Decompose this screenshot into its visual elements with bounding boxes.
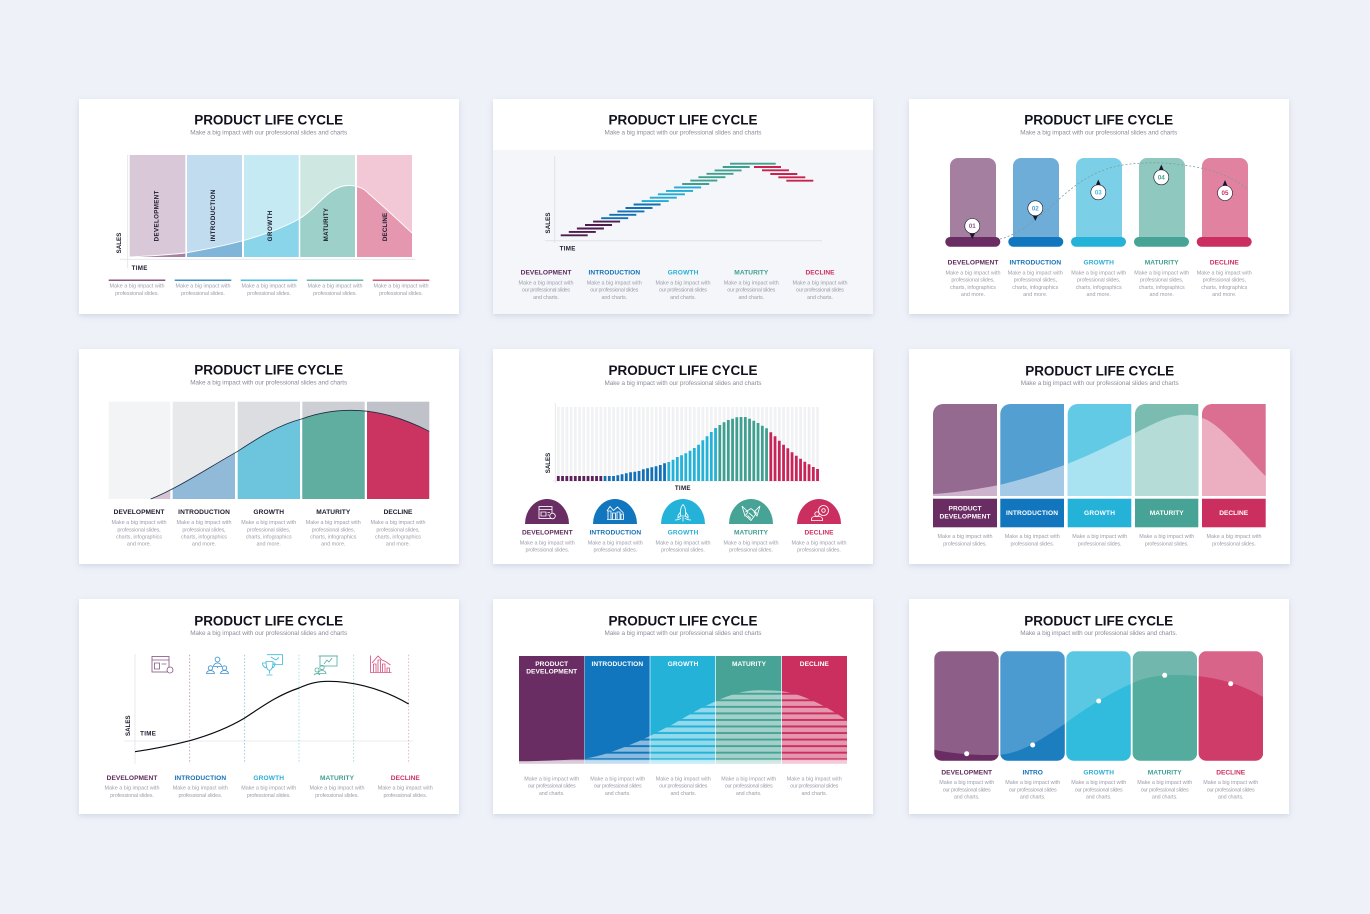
stage: decline with icon: Make a big impact with bbox=[792, 540, 846, 546]
stage notes bbox=[524, 776, 842, 797]
stage: development: Make a big impact with bbox=[518, 280, 574, 286]
chart: grey bands and coloured area bbox=[109, 402, 429, 499]
stage: growth: Make a big impact with bbox=[1071, 270, 1126, 276]
stage: introduction: Make a big impact with bbox=[176, 520, 232, 526]
stage: development: Make a big impact with bbox=[946, 270, 1000, 276]
stage notes: Make a big impact with bbox=[173, 786, 228, 792]
stage: growth with icon: Make a big impact with bbox=[656, 540, 710, 546]
stage: development with icon: DEVELOPMENT bbox=[522, 530, 573, 537]
stage: introduction: charts, infographics bbox=[181, 534, 227, 540]
stage notes bbox=[938, 534, 1262, 547]
stage: decline with icon bbox=[792, 499, 846, 554]
pin 03: 03 bbox=[1095, 190, 1102, 196]
stage: introduction: Make a big impact with bbox=[1008, 270, 1063, 276]
stage: maturity: charts, infographics bbox=[310, 534, 357, 540]
stage notes: Make a big impact with bbox=[1206, 534, 1262, 540]
subtitle: Make a big impact with our professional slides and charts bbox=[604, 380, 762, 387]
stage notes: and charts. bbox=[1152, 794, 1178, 800]
stage: growth: charts, infographics bbox=[246, 534, 292, 540]
stage notes: our professional slides bbox=[528, 784, 576, 790]
stage: maturity: and more. bbox=[321, 542, 345, 548]
axis label: sales: SALES bbox=[545, 212, 552, 234]
stage notes: Make a big impact with bbox=[104, 786, 160, 792]
stage notes: Make a big impact with bbox=[1071, 780, 1126, 786]
stage: introduction: INTRODUCTION bbox=[588, 270, 640, 277]
stage: development bbox=[518, 270, 574, 301]
pin 01: 01 bbox=[969, 223, 976, 230]
stage notes: Make a big impact with bbox=[939, 780, 994, 786]
stage notes: professional slides. bbox=[178, 793, 222, 799]
stage: growth with icon: GROWTH bbox=[668, 530, 699, 537]
pin 05: 05 bbox=[1222, 190, 1229, 197]
subtitle: Make a big impact with our professional slides and charts bbox=[1021, 380, 1179, 387]
label bar: maturity: MATURITY bbox=[1150, 510, 1184, 517]
stage: introduction bbox=[1008, 260, 1063, 298]
stage: decline: and charts. bbox=[807, 295, 833, 301]
stage: maturity with icon bbox=[724, 499, 778, 554]
title: PRODUCT LIFE CYCLE bbox=[194, 113, 343, 128]
chart: shaded stage bands with curve: GROWTH bbox=[267, 210, 274, 241]
stage: growth bbox=[241, 509, 296, 548]
subtitle: Make a big impact with our professional slides and charts bbox=[190, 630, 347, 637]
stage notes: MATURITY bbox=[1148, 770, 1182, 777]
stage notes: Make a big impact with bbox=[1203, 780, 1258, 786]
stage notes: Make a big impact with bbox=[524, 776, 579, 782]
stage: introduction: professional slides, bbox=[1014, 278, 1057, 284]
stage: introduction: professional slides, bbox=[182, 527, 226, 533]
stage notes: our professional slides bbox=[1207, 787, 1255, 793]
axis label: sales: SALES bbox=[116, 233, 123, 253]
stage: maturity: Make a big impact with bbox=[306, 520, 361, 526]
panel: slide 9 rounded cards with dots bbox=[909, 599, 1289, 814]
stage: maturity: MATURITY bbox=[316, 509, 351, 516]
panel: slide 3 pillars with pins bbox=[909, 99, 1289, 314]
stage: maturity bbox=[306, 509, 361, 548]
stage: introduction with icon bbox=[588, 499, 643, 554]
chart: rounded cards with curve and dots bbox=[934, 651, 1263, 761]
pin 04: 04 bbox=[1158, 174, 1165, 182]
chart: rounded stage panels with curve bbox=[933, 404, 1266, 496]
stage: development: charts, infographics bbox=[950, 285, 996, 291]
icon: growth trophy and board bbox=[262, 655, 282, 675]
stage: maturity with icon: Make a big impact with bbox=[724, 540, 778, 546]
stage notes: and charts. bbox=[670, 791, 696, 797]
title: PRODUCT LIFE CYCLE bbox=[608, 613, 758, 628]
stage notes: Make a big impact with bbox=[1005, 780, 1060, 786]
stage: development: and charts. bbox=[533, 295, 559, 301]
label bar: maturity bbox=[1135, 499, 1198, 527]
icon: development browser window bbox=[152, 656, 173, 673]
pin 02 bbox=[1028, 201, 1043, 221]
stage: development: professional slides, bbox=[117, 527, 161, 533]
stage: decline: and more. bbox=[1212, 292, 1236, 298]
stage: decline: Make a big impact with bbox=[792, 280, 848, 286]
panel: slide 4 grey bands with curve bbox=[79, 349, 459, 564]
chart: shaded stage bands with curve: MATURITY bbox=[323, 207, 330, 241]
stage: introduction with icon: Make a big impact with bbox=[588, 540, 643, 546]
stage: decline: Make a big impact with bbox=[370, 520, 426, 526]
stage notes: our professional slides bbox=[594, 784, 642, 790]
chart: shaded stage bands with curve: DECLINE bbox=[382, 213, 389, 241]
stage: introduction: INTRODUCTION bbox=[178, 509, 230, 516]
stage notes: Make a big impact with bbox=[1072, 534, 1127, 540]
pin 03 bbox=[1091, 180, 1106, 200]
stage notes: and charts. bbox=[736, 791, 762, 797]
stage notes: our professional slides bbox=[725, 784, 773, 790]
chart: columns and striped area: DECLINE bbox=[800, 661, 829, 668]
stage: development: DEVELOPMENT bbox=[114, 509, 164, 516]
stage notes: Make a big impact with bbox=[241, 786, 296, 792]
stage: growth: our professional slides bbox=[659, 288, 707, 294]
stage notes: GROWTH bbox=[253, 775, 284, 782]
stage notes bbox=[109, 280, 429, 297]
pin 04 bbox=[1154, 164, 1169, 185]
stage: growth with icon: professional slides. bbox=[661, 548, 705, 554]
chart: columns and striped area: PRODUCT bbox=[535, 661, 568, 668]
stage notes: our professional slides bbox=[659, 784, 708, 790]
stage: development: our professional slides bbox=[522, 288, 570, 294]
chart: shaded stage bands with curve: INTRODUCTION bbox=[210, 189, 217, 241]
stage notes bbox=[939, 770, 1258, 800]
stage: decline: DECLINE bbox=[384, 509, 413, 516]
subtitle: Make a big impact with our professional slides and charts bbox=[190, 379, 347, 386]
stage: maturity: charts, infographics bbox=[1139, 285, 1185, 291]
stage: growth: GROWTH bbox=[1084, 260, 1114, 267]
stage: decline: professional slides, bbox=[1203, 278, 1246, 284]
stage: decline: professional slides, bbox=[376, 527, 420, 533]
stage notes: professional slides. bbox=[247, 793, 291, 799]
stage: introduction with icon: professional slides. bbox=[593, 548, 637, 554]
stage notes: Make a big impact with bbox=[590, 776, 645, 782]
label bar: product development: PRODUCT bbox=[948, 506, 982, 513]
stage: decline with icon: DECLINE bbox=[804, 530, 834, 537]
subtitle: Make a big impact with our professional slides and charts bbox=[190, 130, 347, 136]
title: PRODUCT LIFE CYCLE bbox=[194, 363, 343, 378]
stage notes: Make a big impact with bbox=[656, 776, 711, 782]
stage: development: charts, infographics bbox=[116, 534, 162, 540]
stage notes: professional slides. bbox=[247, 291, 291, 297]
panel: slide 8 solid columns with striped area bbox=[493, 599, 873, 814]
stage notes: professional slides. bbox=[315, 793, 359, 799]
chart: pillars bbox=[945, 158, 1252, 247]
stage notes: and charts. bbox=[1086, 794, 1112, 800]
pin 02: 02 bbox=[1032, 206, 1039, 212]
stage: growth: Make a big impact with bbox=[241, 520, 296, 526]
stage notes: and charts. bbox=[605, 791, 631, 797]
stage: growth: Make a big impact with bbox=[656, 280, 710, 286]
stage: maturity: Make a big impact with bbox=[1134, 270, 1189, 276]
label bar: introduction: INTRODUCTION bbox=[1006, 510, 1058, 517]
icon: maturity presenter and chart bbox=[314, 656, 338, 675]
stage notes: our professional slides bbox=[943, 787, 991, 793]
axis label: time: TIME bbox=[560, 246, 575, 253]
stage notes: Make a big impact with bbox=[176, 284, 230, 290]
stage: maturity: professional slides, bbox=[312, 527, 355, 533]
stage: growth: GROWTH bbox=[668, 270, 699, 277]
stage notes: professional slides. bbox=[313, 291, 357, 297]
axis label: sales: SALES bbox=[545, 453, 552, 473]
stage notes: and charts. bbox=[1020, 794, 1046, 800]
stage notes: INTRODUCTION bbox=[174, 775, 226, 782]
stage: introduction: Make a big impact with bbox=[587, 280, 642, 286]
chart: columns and striped area bbox=[519, 656, 847, 764]
chart: life cycle line with dashed dividers bbox=[124, 654, 413, 764]
stage notes: professional slides. bbox=[115, 291, 159, 297]
stage notes: professional slides. bbox=[943, 541, 987, 547]
stage: growth: professional slides, bbox=[247, 527, 291, 533]
label bar: decline: DECLINE bbox=[1219, 510, 1249, 517]
stage notes: professional slides. bbox=[110, 793, 154, 799]
stage: decline bbox=[1197, 260, 1252, 298]
label bar: product development: DEVELOPMENT bbox=[940, 514, 990, 521]
stage: maturity bbox=[1134, 260, 1189, 298]
stage: decline: Make a big impact with bbox=[1197, 270, 1252, 276]
stage notes: professional slides. bbox=[1145, 541, 1189, 547]
title: PRODUCT LIFE CYCLE bbox=[194, 613, 343, 628]
stage notes: INTRO bbox=[1023, 770, 1043, 777]
stage: growth bbox=[1071, 260, 1126, 298]
stage: development bbox=[112, 509, 166, 548]
stage: introduction: our professional slides bbox=[590, 288, 639, 294]
chart: columns and striped area: DEVELOPMENT bbox=[526, 669, 577, 676]
chart: staircase bars bbox=[545, 156, 822, 243]
stage: maturity: and more. bbox=[1150, 292, 1174, 298]
stage notes: professional slides. bbox=[1010, 541, 1054, 547]
stage notes: Make a big impact with bbox=[1137, 780, 1192, 786]
label bar: decline bbox=[1202, 499, 1266, 527]
stage: introduction: and more. bbox=[192, 542, 216, 548]
title: PRODUCT LIFE CYCLE bbox=[1024, 113, 1173, 128]
title: PRODUCT LIFE CYCLE bbox=[1025, 363, 1174, 378]
stage: growth: charts, infographics bbox=[1076, 285, 1122, 291]
stage notes: professional slides. bbox=[1078, 541, 1122, 547]
label bar: growth bbox=[1068, 499, 1131, 527]
axis label: time: TIME bbox=[140, 731, 156, 738]
stage: development: DEVELOPMENT bbox=[521, 270, 571, 277]
stage: maturity: professional slides, bbox=[1140, 278, 1184, 284]
stage: development: Make a big impact with bbox=[112, 520, 166, 526]
stage notes: Make a big impact with bbox=[374, 284, 428, 290]
label bar: product development bbox=[933, 499, 997, 527]
stage notes: professional slides. bbox=[1212, 541, 1256, 547]
stage notes: our professional slides bbox=[790, 784, 839, 790]
stage: growth with icon bbox=[656, 499, 710, 554]
stage: growth bbox=[656, 270, 710, 301]
stage: decline: charts, infographics bbox=[375, 534, 421, 540]
panel: slide 6 rounded tabs with curve bbox=[909, 349, 1290, 564]
stage notes: DEVELOPMENT bbox=[107, 775, 157, 782]
stage notes: our professional slides bbox=[1141, 787, 1189, 793]
stage: development with icon: Make a big impact with bbox=[520, 540, 575, 546]
label bar: growth: GROWTH bbox=[1084, 510, 1115, 517]
stage: decline: DECLINE bbox=[1210, 260, 1239, 267]
stage notes: Make a big impact with bbox=[938, 534, 992, 540]
stage: decline: charts, infographics bbox=[1201, 285, 1248, 291]
stage notes: professional slides. bbox=[383, 793, 427, 799]
stage: decline: our professional slides bbox=[796, 288, 844, 294]
chart: columns and striped area: GROWTH bbox=[668, 661, 699, 668]
stage notes: professional slides. bbox=[181, 291, 225, 297]
stage: growth: and more. bbox=[1087, 292, 1111, 298]
icon: introduction people network bbox=[206, 657, 228, 674]
stage notes: Make a big impact with bbox=[378, 786, 433, 792]
stage: introduction: INTRODUCTION bbox=[1009, 260, 1061, 267]
subtitle: Make a big impact with our professional slides and charts bbox=[604, 130, 762, 136]
stage notes: DECLINE bbox=[391, 775, 420, 782]
chart: shaded stage bands with curve: DEVELOPMENT bbox=[154, 190, 161, 241]
stage notes: DECLINE bbox=[1216, 770, 1246, 777]
stage: maturity: and charts. bbox=[738, 295, 764, 301]
stage: maturity with icon: MATURITY bbox=[734, 530, 769, 537]
stage: growth: and charts. bbox=[670, 295, 696, 301]
stage notes: Make a big impact with bbox=[721, 776, 776, 782]
stage: decline bbox=[792, 270, 848, 301]
label bar: introduction bbox=[1000, 499, 1064, 527]
stage notes: and charts. bbox=[539, 791, 565, 797]
stage: maturity: our professional slides bbox=[727, 288, 776, 294]
panel: slide 7 line chart with outline icons bbox=[79, 599, 459, 814]
stage: development: professional slides, bbox=[951, 278, 995, 284]
stage: growth: and more. bbox=[257, 542, 281, 548]
stage notes: and charts. bbox=[1218, 794, 1244, 800]
stage: maturity: MATURITY bbox=[1145, 260, 1179, 267]
stage: maturity with icon: professional slides. bbox=[729, 548, 773, 554]
stage: introduction: and more. bbox=[1023, 292, 1047, 298]
stage notes: professional slides. bbox=[379, 291, 423, 297]
stage notes: and charts. bbox=[801, 791, 827, 797]
stage: decline: and more. bbox=[386, 542, 410, 548]
icon: decline bar chart bbox=[370, 656, 392, 672]
pin 01 bbox=[965, 218, 980, 239]
panel: slide 2 staircase chart bbox=[493, 99, 873, 314]
pin 05 bbox=[1218, 180, 1232, 200]
stage: maturity bbox=[724, 270, 779, 301]
title: PRODUCT LIFE CYCLE bbox=[608, 363, 758, 378]
panel: slide 1 shaded band chart bbox=[79, 99, 459, 314]
stage: development: and more. bbox=[961, 292, 985, 298]
chart: columns and striped area: INTRODUCTION bbox=[591, 661, 643, 668]
stage: development with icon bbox=[520, 499, 575, 554]
stage: decline with icon: professional slides. bbox=[797, 548, 841, 554]
stage notes: DEVELOPMENT bbox=[941, 770, 992, 777]
stage notes: Make a big impact with bbox=[310, 786, 364, 792]
chart: shaded stage bands with curve bbox=[120, 155, 415, 268]
stage notes bbox=[104, 775, 433, 799]
subtitle: Make a big impact with our professional slides and charts bbox=[604, 630, 762, 637]
stage: decline bbox=[370, 509, 426, 548]
stage: development: and more. bbox=[127, 542, 151, 548]
stage: maturity: Make a big impact with bbox=[724, 280, 779, 286]
stage notes: GROWTH bbox=[1083, 770, 1114, 777]
stage: decline: DECLINE bbox=[806, 270, 835, 277]
stage: growth: professional slides, bbox=[1077, 278, 1121, 284]
stage: development bbox=[946, 260, 1000, 298]
stage: maturity: MATURITY bbox=[734, 270, 769, 277]
stage notes: Make a big impact with bbox=[1139, 534, 1194, 540]
stage: introduction: charts, infographics bbox=[1012, 285, 1059, 291]
subtitle: Make a big impact with our professional slides and charts bbox=[1020, 130, 1177, 136]
stage notes: MATURITY bbox=[320, 775, 355, 782]
title: PRODUCT LIFE CYCLE bbox=[608, 113, 758, 128]
stage notes: Make a big impact with bbox=[1005, 534, 1060, 540]
stage notes: Make a big impact with bbox=[787, 776, 842, 782]
stage notes: Make a big impact with bbox=[242, 284, 296, 290]
stage: introduction bbox=[587, 270, 642, 301]
subtitle: Make a big impact with our professional slides and charts. bbox=[1020, 630, 1177, 637]
stage notes: our professional slides bbox=[1009, 787, 1057, 793]
stage: development: DEVELOPMENT bbox=[948, 260, 998, 267]
chart: histogram bars bbox=[553, 403, 821, 483]
stage: introduction: and charts. bbox=[601, 295, 627, 301]
axis label: sales: SALES bbox=[125, 715, 132, 736]
stage: development with icon: professional slides. bbox=[525, 548, 569, 554]
stage notes: Make a big impact with bbox=[308, 284, 362, 290]
stage: introduction bbox=[176, 509, 232, 548]
axis label: time: TIME bbox=[675, 485, 691, 492]
stage notes: our professional slides bbox=[1075, 787, 1123, 793]
chart: columns and striped area: MATURITY bbox=[732, 661, 767, 668]
axis label: time: TIME bbox=[132, 265, 147, 272]
stage: growth: GROWTH bbox=[253, 509, 284, 516]
stage notes: Make a big impact with bbox=[110, 284, 164, 290]
title: PRODUCT LIFE CYCLE bbox=[1024, 613, 1173, 628]
panel: slide 5 bar histogram with icons bbox=[493, 349, 873, 564]
stage: introduction with icon: INTRODUCTION bbox=[589, 530, 641, 537]
stage notes: and charts. bbox=[954, 794, 980, 800]
